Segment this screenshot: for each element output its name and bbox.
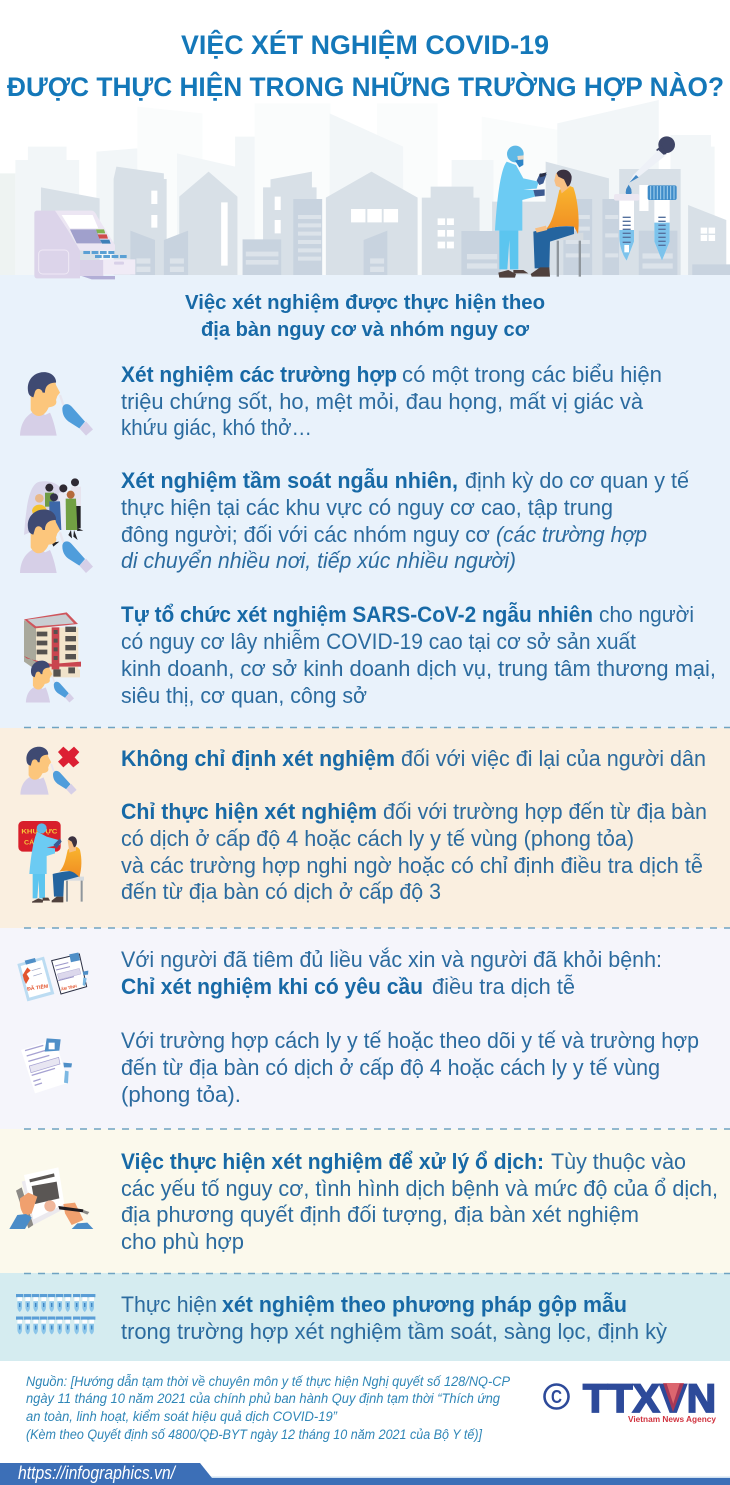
icon: quarantine zone and doctor: [18, 821, 84, 903]
text: testing only for high-level areas: [121, 799, 707, 904]
text: testing only for high-level areas: Chỉ thực hiện xét nghiệm: [121, 799, 377, 824]
text: quarantine cases: [121, 1028, 699, 1107]
text: random screening: đông người; đối với các nhóm nguy cơ: [121, 522, 490, 547]
icon: medical record and vial: [21, 1038, 72, 1093]
source note: an toàn, linh hoạt, kiểm soát hiệu quả dịch COVID-19”: [26, 1409, 337, 1424]
text: symptomatic cases: có một trong các biểu hiện: [402, 362, 662, 387]
text: quarantine cases: đến từ địa bàn có dịch ở cấp độ 4 hoặc cách ly y tế vùng: [121, 1055, 660, 1080]
text: symptomatic cases: khứu giác, khó thở…: [121, 415, 312, 440]
text: random screening: thực hiện tại các khu vực có nguy cơ cao, tập trung: [121, 495, 613, 520]
footer bar: [0, 1463, 730, 1485]
icon: vaccination and test certificates: [17, 952, 88, 1001]
text: random screening: Xét nghiệm tầm soát ngẫu nhiên,: [121, 468, 458, 493]
text: pooled testing: Thực hiện: [121, 1292, 217, 1317]
text: random screening: [121, 468, 689, 573]
source note: (Kèm theo Quyết định số 4800/QĐ-BYT ngày 12 tháng 10 năm 2021 của Bộ Y tế)]: [26, 1427, 483, 1442]
illustration: lab analyzer machine: [34, 211, 135, 279]
footer bar: https://infographics.vn/: [18, 1463, 177, 1483]
text: pooled testing: xét nghiệm theo phương pháp gộp mẫu: [222, 1292, 627, 1317]
text: random screening: di chuyển nhiều nơi, tiếp xúc nhiều người): [121, 548, 516, 573]
text: self-organised testing: Tự tổ chức xét nghiệm SARS-CoV-2 ngẫu nhiên: [121, 602, 593, 627]
text: testing only for high-level areas: đối với trường hợp đến từ địa bàn: [383, 799, 707, 824]
title: ĐƯỢC THỰC HIỆN TRONG NHỮNG TRƯỜNG HỢP NÀO?: [7, 71, 724, 102]
subtitle: Việc xét nghiệm được thực hiện theo: [185, 292, 545, 314]
icon: crowd and swab: [20, 478, 93, 573]
illustration: doctor swabbing patient: [495, 146, 583, 278]
icon: signing document: [9, 1167, 93, 1229]
text: pooled testing: trong trường hợp xét nghiệm tầm soát, sàng lọc, định kỳ: [121, 1319, 668, 1344]
title: VIỆC XÉT NGHIỆM COVID-19: [181, 29, 549, 60]
icon: vaccination and test certificates: ÂM TÍNH: [61, 983, 77, 992]
text: outbreak handling: [121, 1149, 718, 1254]
icon: apartment building and swab: [24, 612, 81, 703]
text: no testing for travel: đối với việc đi lại của người dân: [401, 746, 706, 771]
icon: quarantine zone and doctor: KHU VỰC: [21, 828, 58, 835]
text: vaccinated and recovered: Chỉ xét nghiệm khi có yêu cầu: [121, 974, 423, 999]
text: symptomatic cases: Xét nghiệm các trường hợp: [121, 362, 397, 387]
source note: ngày 11 tháng 10 năm 2021 của chính phủ ban hành Quy định tạm thời “Thích ứng: [26, 1391, 500, 1406]
subtitle: [185, 292, 545, 341]
logo: TTXVN: C: [551, 1387, 562, 1407]
text: symptomatic cases: triệu chứng sốt, ho, mệt mỏi, đau họng, mất vị giác và: [121, 389, 643, 414]
text: quarantine cases: (phong tỏa).: [121, 1082, 241, 1107]
text: random screening: định kỳ do cơ quan y tế: [465, 468, 689, 493]
text: testing only for high-level areas: và các trường hợp nghi ngờ hoặc có chỉ định điều tra dịch tễ: [121, 853, 703, 878]
illustration: dropper and test tubes: [614, 136, 677, 261]
logo: TTXVN: TTXVN: [583, 1377, 716, 1421]
icon: quarantine zone and doctor: CÁCH LY: [24, 838, 55, 847]
illustration: city skyline: [0, 100, 730, 275]
title: [7, 29, 724, 102]
text: symptomatic cases: [121, 362, 662, 440]
icon: person being swabbed: [20, 372, 93, 436]
text: outbreak handling: cho phù hợp: [121, 1229, 244, 1254]
source note: Nguồn: [Hướng dẫn tạm thời về chuyên môn y tế thực hiện Nghị quyết số 128/NQ-CP: [26, 1374, 510, 1389]
text: self-organised testing: có nguy cơ lây nhiễm COVID-19 cao tại cơ sở sản xuất: [121, 629, 637, 654]
text: outbreak handling: các yếu tố nguy cơ, tình hình dịch bệnh và mức độ của ổ dịch,: [121, 1176, 718, 1201]
icon: no testing, red cross: [20, 747, 79, 795]
text: no testing for travel: [121, 746, 706, 771]
text: self-organised testing: kinh doanh, cơ sở kinh doanh dịch vụ, trung tâm thương mại,: [121, 656, 716, 681]
text: self-organised testing: [121, 602, 716, 708]
text: outbreak handling: địa phương quyết định đối tượng, địa bàn xét nghiệm: [121, 1202, 639, 1227]
logo: TTXVN: Vietnam News Agency: [628, 1414, 716, 1424]
text: random screening: (các trường hợp: [496, 522, 647, 547]
text: no testing for travel: Không chỉ định xét nghiệm: [121, 746, 395, 771]
icon: rows of sample tubes: [16, 1294, 95, 1334]
text: pooled testing: [121, 1292, 668, 1344]
text: self-organised testing: cho người: [599, 602, 694, 627]
source note: [26, 1374, 510, 1442]
text: vaccinated and recovered: Với người đã tiêm đủ liều vắc xin và người đã khỏi bệnh:: [121, 947, 662, 972]
subtitle: địa bàn nguy cơ và nhóm nguy cơ: [201, 319, 530, 341]
dashed section dividers: [24, 728, 730, 1274]
text: testing only for high-level areas: có dịch ở cấp độ 4 hoặc cách ly y tế vùng (phong tỏa): [121, 826, 634, 851]
text: vaccinated and recovered: điều tra dịch tễ: [432, 974, 575, 999]
icon: vaccination and test certificates: ĐÃ TIÊM: [26, 982, 49, 993]
text: self-organised testing: siêu thị, cơ quan, công sở: [121, 683, 367, 708]
text: testing only for high-level areas: đến từ địa bàn có dịch ở cấp độ 3: [121, 879, 441, 904]
text: outbreak handling: Tùy thuộc vào: [551, 1149, 686, 1174]
ground strip: [0, 275, 730, 289]
text: vaccinated and recovered: [121, 947, 662, 999]
text: quarantine cases: Với trường hợp cách ly y tế hoặc theo dõi y tế và trường hợp: [121, 1028, 699, 1053]
text: outbreak handling: Việc thực hiện xét nghiệm để xử lý ổ dịch:: [121, 1149, 544, 1174]
